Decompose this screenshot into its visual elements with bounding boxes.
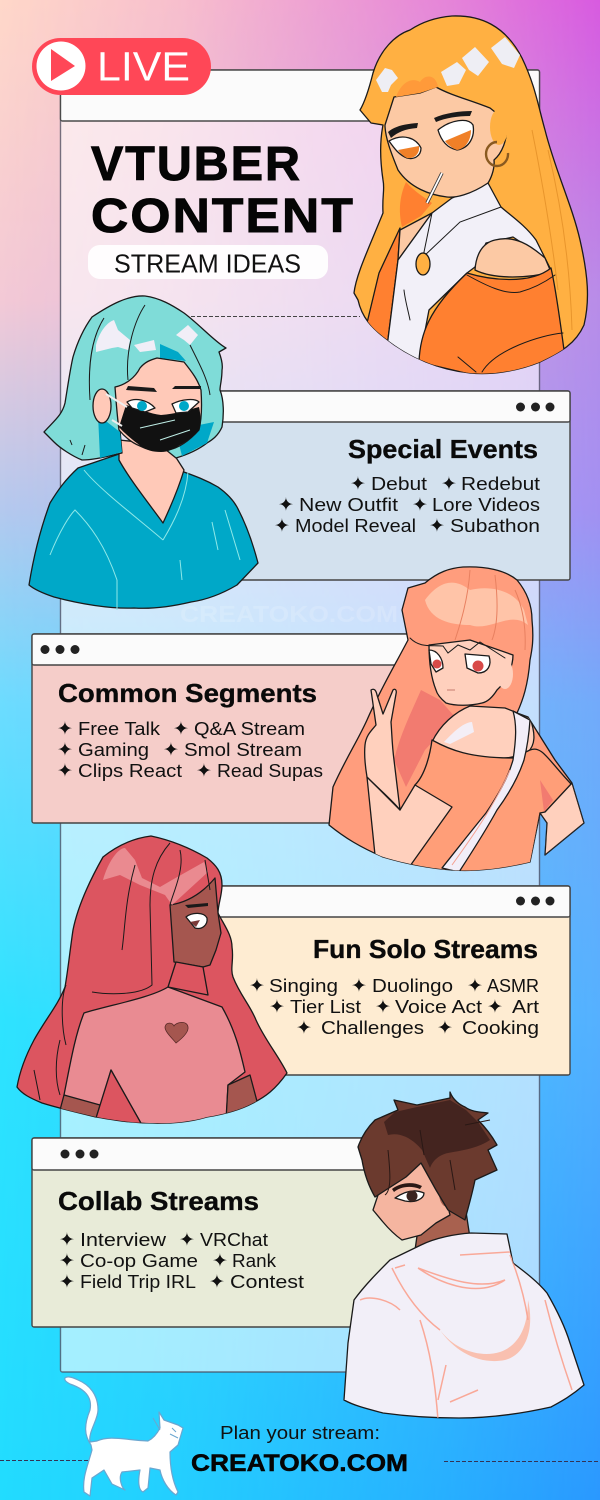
list: collab streams: Interview (80, 1229, 167, 1250)
list: common segments: ✦ (163, 739, 179, 761)
window dots (516, 896, 554, 906)
list: special events: Model Reveal (295, 515, 416, 536)
earring (486, 142, 508, 166)
forearm and upper arm (367, 777, 452, 866)
list: fun solo streams: ✦ (296, 1017, 312, 1039)
list: common segments: ✦ (57, 739, 73, 761)
list: common segments (57, 718, 323, 782)
list: fun solo streams (249, 975, 539, 1039)
neck (415, 1205, 470, 1250)
list: collab streams: Rank (232, 1250, 277, 1271)
main browser window panel (60, 70, 540, 1372)
character: teal hair girl with mask (29, 296, 258, 610)
subtitle pill: STREAM IDEAS (114, 248, 301, 278)
list: collab streams: Co-op Game (80, 1250, 198, 1271)
face (429, 640, 513, 705)
window dots (60, 1150, 98, 1158)
hand peace sign (365, 689, 400, 810)
title: VTUBER (91, 138, 302, 191)
list: special events: Subathon (450, 515, 540, 536)
lollipop stick (427, 173, 442, 203)
back skin (432, 706, 534, 759)
character: red hair girl (17, 836, 287, 1125)
list: fun solo streams: ✦ (487, 996, 503, 1018)
heading: collab streams: Collab Streams (58, 1186, 259, 1216)
heading: fun solo streams: Fun Solo Streams (313, 934, 538, 964)
list: special events (274, 473, 540, 537)
list: common segments: Q&A Stream (194, 718, 305, 739)
list: common segments: Read Supas (217, 760, 323, 781)
list: special events: ✦ (350, 473, 366, 495)
list: fun solo streams: ✦ (269, 996, 285, 1018)
live label: LIVE (97, 44, 190, 90)
footer call to action: Plan your stream: (220, 1422, 380, 1443)
eyes (429, 650, 490, 673)
watermark: CREATOKO.COM (180, 601, 398, 627)
list: fun solo streams: Singing (269, 975, 338, 996)
hair highlights (96, 320, 198, 352)
list: fun solo streams: Art (512, 996, 539, 1017)
footer call to action (191, 1422, 408, 1477)
bangs and highlights (425, 583, 528, 626)
list: special events: ✦ (278, 494, 294, 516)
list: common segments: Free Talk (78, 718, 161, 739)
panel: fun solo streams (190, 886, 570, 1075)
list: collab streams: ✦ (212, 1250, 228, 1272)
list: fun solo streams: ✦ (467, 975, 483, 997)
list: fun solo streams: Cooking (462, 1017, 539, 1038)
body (64, 987, 245, 1125)
list: special events: Lore Videos (432, 494, 540, 515)
hair (358, 1092, 497, 1220)
list: fun solo streams: Voice Act (395, 996, 482, 1017)
panel: special events (166, 391, 570, 580)
character: orange hair girl (354, 16, 587, 376)
character: peach hair girl with peace sign (329, 567, 584, 880)
heading: common segments: Common Segments (58, 678, 317, 708)
panel: common segments (32, 634, 432, 823)
list: collab streams: ✦ (179, 1229, 195, 1251)
hoodie (344, 1233, 584, 1418)
list: common segments: ✦ (173, 718, 189, 740)
footer dashed lines (0, 1460, 600, 1462)
live badge (32, 38, 211, 95)
face (385, 87, 506, 197)
title (91, 138, 355, 243)
list: fun solo streams: Tier List (290, 996, 361, 1017)
shirt (405, 740, 572, 880)
list: collab streams: ✦ (209, 1271, 225, 1293)
heading: special events: Special Events (348, 434, 538, 464)
list: fun solo streams: Challenges (321, 1017, 424, 1038)
list: fun solo streams: ASMR (487, 975, 539, 996)
list: special events: ✦ (412, 494, 428, 516)
list: fun solo streams: ✦ (249, 975, 265, 997)
list: fun solo streams: ✦ (375, 996, 391, 1018)
list: collab streams: Field Trip IRL (80, 1271, 196, 1292)
list: common segments: ✦ (57, 760, 73, 782)
title: CONTENT (91, 190, 355, 243)
bag strap (442, 711, 530, 872)
eyes (126, 386, 201, 413)
eye (392, 1183, 424, 1202)
list: collab streams: VRChat (200, 1229, 268, 1250)
face (373, 1160, 450, 1240)
list: fun solo streams: ✦ (437, 1017, 453, 1039)
list: fun solo streams: ✦ (351, 975, 367, 997)
list: collab streams: Contest (230, 1271, 304, 1292)
footer call to action: CREATOKO.COM (191, 1450, 408, 1477)
window dots (40, 645, 80, 654)
hair (44, 296, 226, 460)
list: special events: ✦ (274, 515, 290, 537)
list: common segments: Gaming (78, 739, 149, 760)
list: common segments: ✦ (57, 718, 73, 740)
eye (185, 903, 208, 928)
heart (165, 1022, 188, 1043)
list: special events: ✦ (441, 473, 457, 495)
panel: collab streams (32, 1138, 432, 1327)
hair highlights (376, 37, 520, 92)
icon: play button (36, 42, 86, 90)
list: special events: Debut (371, 473, 427, 494)
list: common segments: Smol Stream (184, 739, 302, 760)
hair highlight and strands (103, 848, 208, 905)
cat illustration (65, 1377, 183, 1496)
neck and face (170, 878, 221, 967)
list: special events: ✦ (429, 515, 445, 537)
list: common segments: ✦ (196, 760, 212, 782)
necklace (416, 207, 501, 275)
list: fun solo streams: Duolingo (372, 975, 453, 996)
list: collab streams: ✦ (59, 1271, 75, 1293)
list: common segments: Clips React (78, 760, 182, 781)
list: collab streams: ✦ (59, 1229, 75, 1251)
list: special events: Redebut (461, 473, 540, 494)
character: brown hair boy in hoodie (344, 1092, 584, 1420)
list: collab streams (59, 1229, 304, 1293)
mask (119, 405, 200, 452)
eyes (389, 120, 473, 159)
list: special events: New Outfit (299, 494, 398, 515)
window dots (516, 402, 554, 412)
face (115, 358, 202, 451)
list: collab streams: ✦ (59, 1250, 75, 1272)
